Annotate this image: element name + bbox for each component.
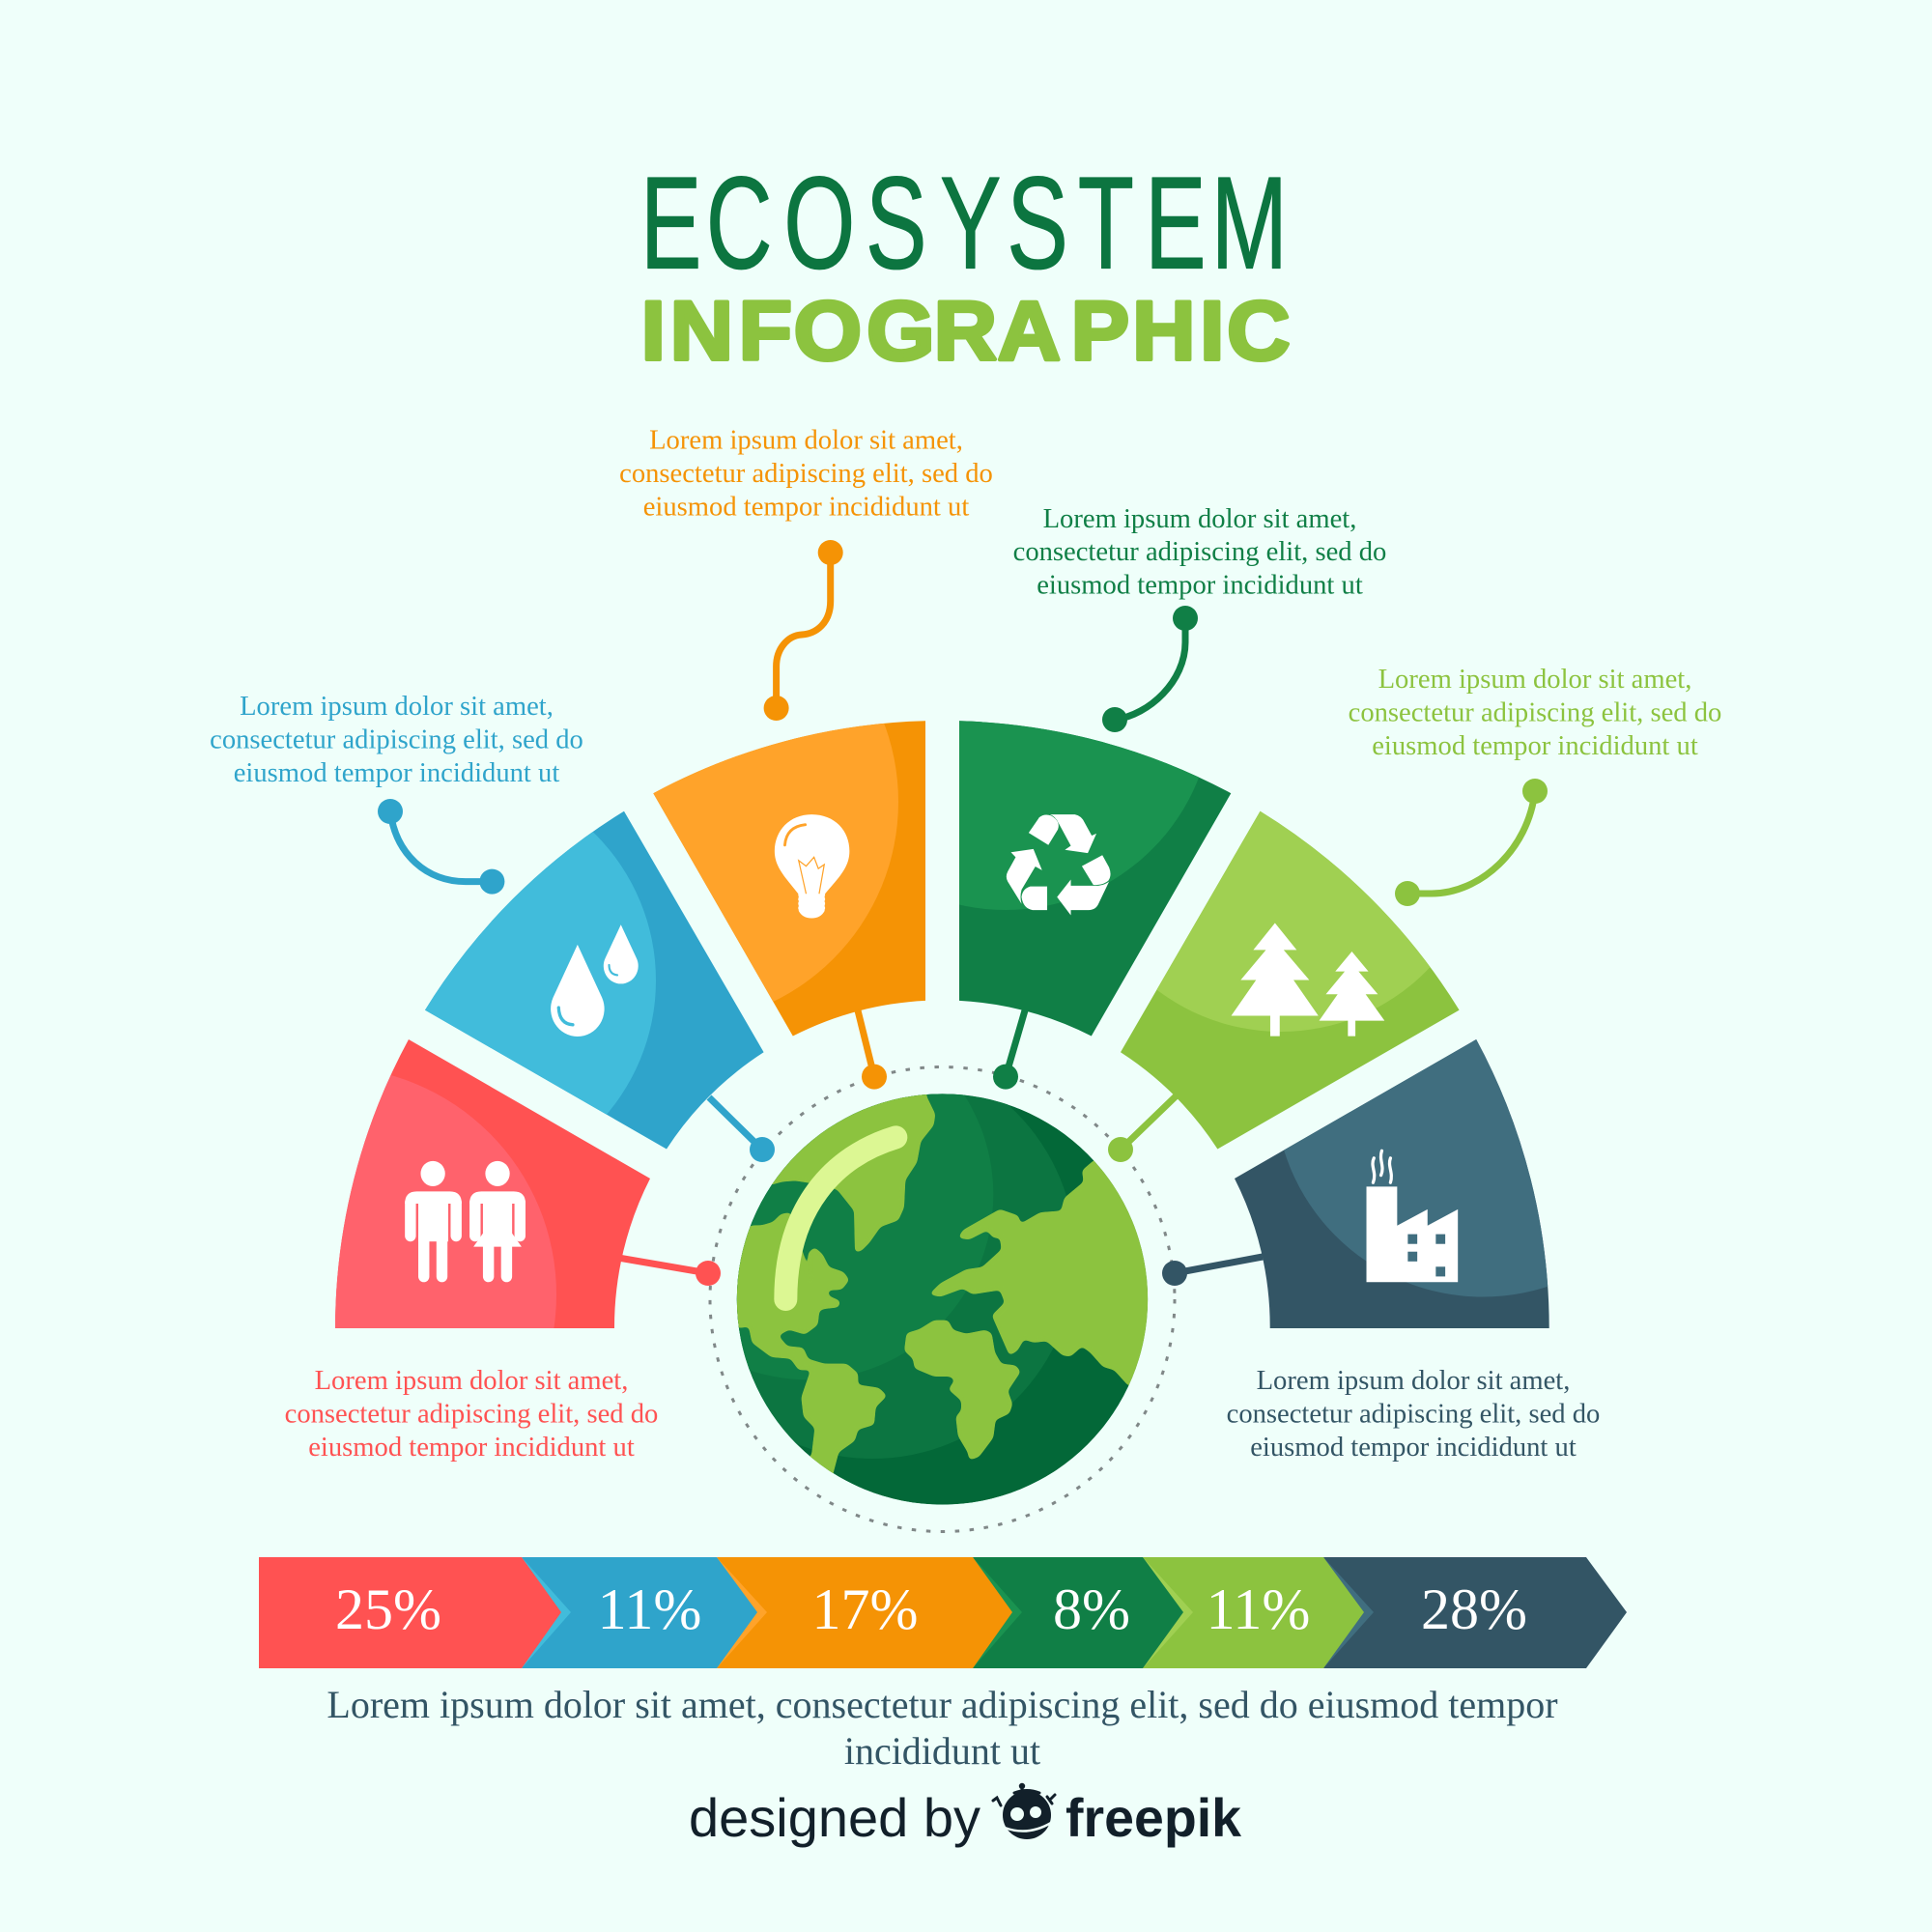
continent: africa bbox=[904, 1321, 1021, 1461]
blue caption: eiusmod tempor incididunt ut bbox=[234, 758, 559, 788]
icon: water drops bbox=[551, 924, 639, 1037]
icon: pine trees bbox=[1232, 923, 1384, 1037]
outer connector: lime bbox=[1395, 779, 1548, 906]
continent: north polar landmass bbox=[772, 1094, 935, 1252]
outer connector: blue bbox=[378, 799, 504, 895]
inner connector: blue bbox=[709, 1097, 775, 1162]
dark green caption: consectetur adipiscing elit, sed do bbox=[1013, 537, 1386, 567]
segment: lime 11% bbox=[1143, 1557, 1364, 1668]
percentage arrow bar bbox=[259, 1557, 1627, 1668]
inner connector: red bbox=[618, 1258, 721, 1286]
red caption: consectetur adipiscing elit, sed do bbox=[285, 1399, 658, 1430]
orange caption: eiusmod tempor incididunt ut bbox=[643, 493, 969, 522]
credit: designed by freepik bbox=[689, 1783, 1242, 1848]
outer connector: orange bbox=[764, 540, 843, 721]
bottom description bbox=[327, 1683, 1558, 1773]
panel: people (red segment) bbox=[335, 1039, 650, 1328]
segment: orange 17% bbox=[717, 1557, 1012, 1668]
title line: ECOSYSTEM: ECOSYSTEM bbox=[640, 150, 1288, 296]
icon: factory bbox=[1367, 1151, 1458, 1282]
panel: industry (navy segment) bbox=[1235, 1039, 1549, 1328]
value: 28%: 28% bbox=[1421, 1577, 1527, 1641]
icon: light bulb bbox=[775, 814, 849, 918]
credit: designed by freepik: designed by bbox=[689, 1787, 980, 1848]
segment: navy 28% bbox=[1323, 1557, 1627, 1668]
inner connector: dark green bbox=[993, 1010, 1025, 1090]
panel: water (blue segment) bbox=[425, 811, 763, 1150]
title bbox=[640, 150, 1290, 378]
segment: red 25% bbox=[259, 1557, 561, 1668]
orange caption: consectetur adipiscing elit, sed do bbox=[619, 459, 993, 489]
blue caption: Lorem ipsum dolor sit amet, bbox=[240, 692, 554, 722]
lime caption: eiusmod tempor incididunt ut bbox=[1372, 731, 1698, 761]
dark green caption bbox=[1013, 504, 1386, 601]
segment: green 8% bbox=[973, 1557, 1183, 1668]
inner connector: orange bbox=[858, 1010, 887, 1090]
value: 25%: 25% bbox=[335, 1577, 441, 1641]
outer connector: dark green bbox=[1102, 606, 1198, 732]
title line: INFOGRAPHIC: INFOGRAPHIC bbox=[641, 284, 1290, 378]
value: 11%: 11% bbox=[598, 1577, 701, 1641]
bottom description: incididunt ut bbox=[844, 1729, 1040, 1773]
lime caption bbox=[1349, 665, 1721, 761]
inner connector: navy bbox=[1162, 1257, 1263, 1286]
orange caption: Lorem ipsum dolor sit amet, bbox=[649, 425, 963, 456]
dashed orbit ring bbox=[710, 1066, 1175, 1532]
inner connector: lime bbox=[1108, 1096, 1176, 1162]
credit: designed by freepik: freepik bbox=[1065, 1787, 1242, 1848]
dark green caption: Lorem ipsum dolor sit amet, bbox=[1043, 504, 1356, 534]
red caption: Lorem ipsum dolor sit amet, bbox=[315, 1366, 628, 1396]
globe highlight bbox=[785, 1137, 895, 1299]
panel: forest (lime segment) bbox=[1121, 811, 1459, 1150]
blue caption bbox=[210, 692, 583, 788]
navy caption: eiusmod tempor incididunt ut bbox=[1250, 1433, 1577, 1463]
icon: man and woman bbox=[405, 1161, 526, 1282]
panel: recycling (dark green segment) bbox=[959, 721, 1231, 1036]
red caption bbox=[285, 1366, 658, 1463]
continent: americas bbox=[712, 1212, 887, 1504]
lime caption: Lorem ipsum dolor sit amet, bbox=[1378, 665, 1691, 695]
continent: eurasia bbox=[929, 1150, 1179, 1386]
orange caption bbox=[619, 425, 993, 522]
value: 11%: 11% bbox=[1207, 1577, 1310, 1641]
dark green caption: eiusmod tempor incididunt ut bbox=[1037, 570, 1363, 601]
blue caption: consectetur adipiscing elit, sed do bbox=[210, 724, 583, 755]
icon: freepik mascot bbox=[993, 1783, 1055, 1839]
segment: blue 11% bbox=[522, 1557, 757, 1668]
value: 17%: 17% bbox=[812, 1577, 918, 1641]
panel: energy (orange segment) bbox=[653, 721, 925, 1036]
icon: recycle arrows bbox=[1007, 814, 1111, 916]
globe bbox=[736, 1094, 1148, 1505]
navy caption: consectetur adipiscing elit, sed do bbox=[1227, 1399, 1600, 1430]
value: 8%: 8% bbox=[1053, 1577, 1130, 1641]
navy caption: Lorem ipsum dolor sit amet, bbox=[1257, 1366, 1570, 1396]
red caption: eiusmod tempor incididunt ut bbox=[308, 1433, 635, 1463]
navy caption bbox=[1227, 1366, 1600, 1463]
bottom description: Lorem ipsum dolor sit amet, consectetur adipiscing elit, sed do eiusmod tempor bbox=[327, 1683, 1558, 1726]
lime caption: consectetur adipiscing elit, sed do bbox=[1349, 697, 1721, 728]
